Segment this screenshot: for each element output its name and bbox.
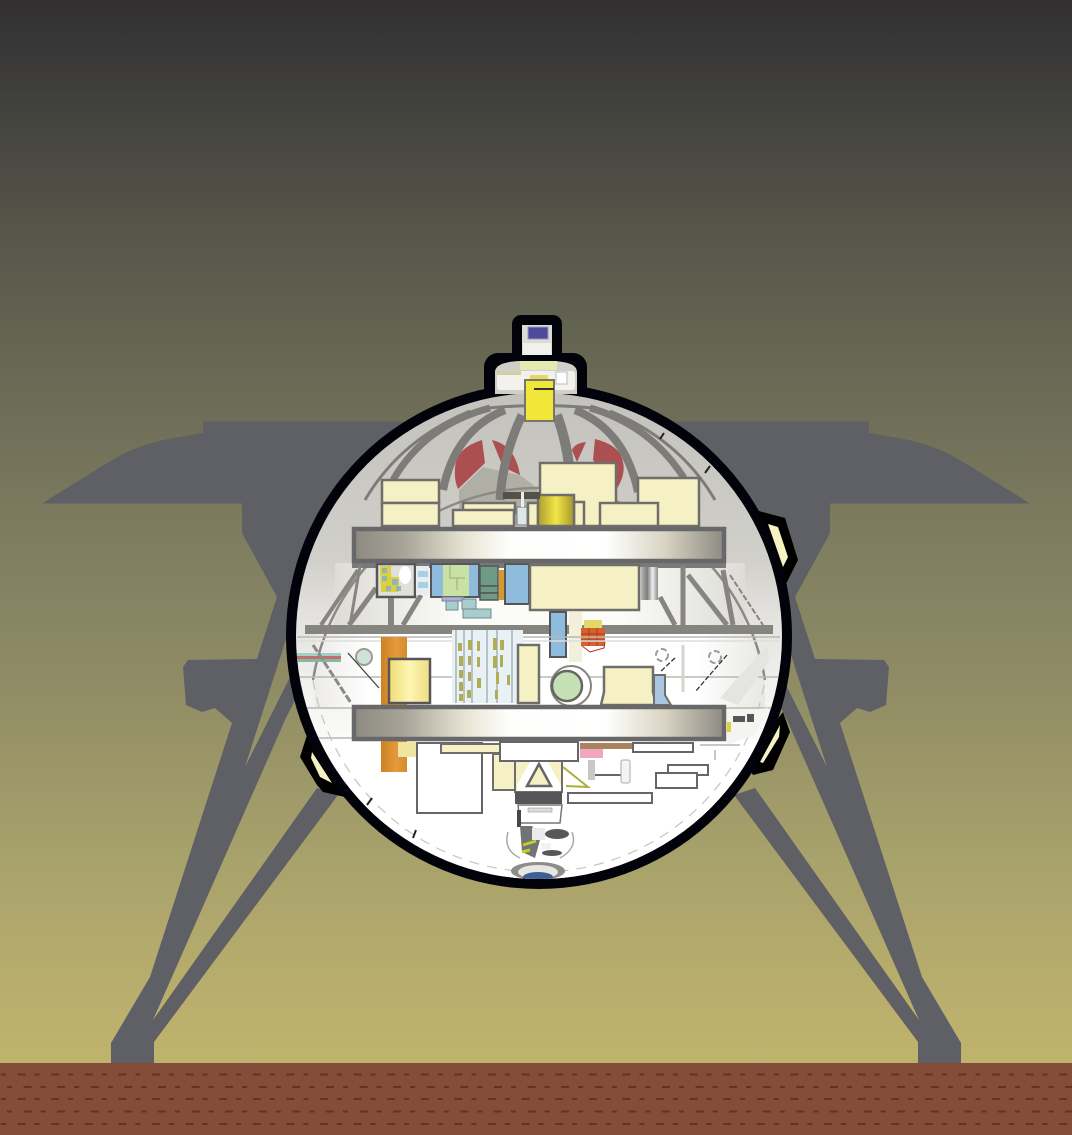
right lower boxes [568,743,708,803]
blue and green board [431,564,479,597]
gold cylinder [538,495,574,526]
left cable bundle [297,653,341,662]
card rack [452,630,523,703]
bumper: upper right [755,510,798,584]
pale yellow tank [389,659,430,703]
bottom lens [511,862,565,882]
under-shelf rail [352,563,726,568]
right edge gear cluster [700,708,768,760]
blue tank [505,564,529,604]
upper shelf [354,529,724,561]
white equipment box [500,742,578,761]
lower white field [330,739,770,880]
brown and pink panels [580,743,632,758]
sphere interior [296,393,782,882]
gray cylinder [640,567,658,600]
truss bay background [335,563,745,627]
orange coil [581,620,605,652]
pale blue module [416,566,429,595]
bumper: upper right pad [768,524,788,567]
truss struts [321,566,763,625]
cream tall box [518,645,539,703]
hatch ticks [367,433,710,838]
large cream box [530,565,639,610]
triangular bracket assembly [515,760,562,804]
ground: soil strip [0,1063,1072,1135]
sphere black shell and top neck [286,315,792,889]
small instrument [503,492,540,525]
sphere cutaway [286,315,792,889]
flared cream box [601,667,656,705]
red fan blades [455,439,624,490]
neck: collar [495,361,577,394]
bumper: lower right [745,712,790,775]
side brackets [313,645,727,703]
rocky fill behind payload [459,467,537,525]
mid-level gray beam [305,625,773,634]
teal piping [442,597,491,618]
silhouette: left half [42,422,540,1063]
bumper: lower left pad [311,752,332,783]
neck: camera head [522,325,552,355]
bumper: lower right pad [760,725,780,763]
side bumpers on the sphere [300,510,798,797]
upper deck payload boxes [382,463,699,526]
inner frame ring [313,488,765,872]
lower shelf [354,707,724,739]
lander silhouette: deck and legs [42,422,1030,1063]
lower bay rails [297,637,780,738]
soil dash rows [0,1074,1072,1124]
lower bay background [315,633,765,709]
blue side box [654,675,671,705]
electronics box [377,564,415,597]
green stacked unit [480,566,498,600]
round green tank [551,666,591,706]
bottom mechanism [507,805,574,858]
orange tank [381,637,407,772]
bumper: lower left [300,735,345,797]
dome ribs [365,406,715,500]
small actuator rod [563,760,630,787]
blue column [550,612,566,657]
lower shelf underside parts [398,742,515,813]
orange strip [499,570,504,600]
silhouette: right half [532,422,1030,1063]
pale support column [569,612,582,662]
right bay gray wedge [720,652,769,705]
top yellow module [525,380,554,421]
